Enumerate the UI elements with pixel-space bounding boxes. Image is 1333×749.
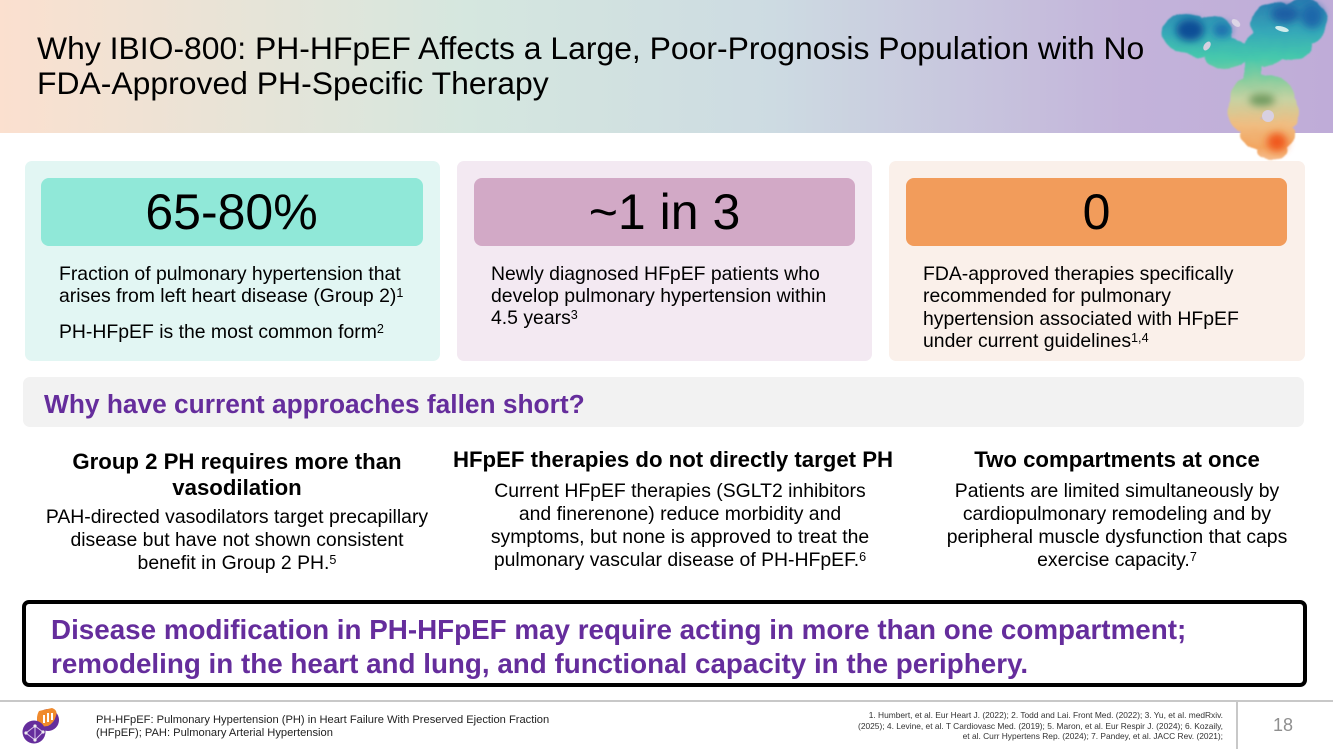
text: FDA-approved therapies: under current guidelines1,4 (923, 330, 1149, 352)
column: Group 2 PH: vasodilation (172, 475, 302, 500)
section heading: Why have current approaches fallen short? (44, 389, 585, 419)
icon: logo (22, 708, 59, 744)
icon: antibody (1160, 0, 1329, 161)
stat card: 0: 0 (1083, 184, 1110, 240)
stat card: 65-80% (41, 178, 422, 246)
column: Group 2 PH (46, 449, 428, 574)
column: Group 2 PH: PAH-directed vasodilators target precapillary (46, 506, 428, 528)
antibody gaps (1202, 40, 1212, 52)
callout: remodeling in the heart and lung, and functional capacity in the periphery. (51, 648, 1028, 679)
text: FDA-approved therapies (923, 263, 1239, 352)
panel: zero therapies stat (889, 161, 1305, 361)
text: FDA-approved therapies: recommended for pulmonary (923, 285, 1171, 307)
text: left heart disease fraction: PH-HFpEF is the most common form2 (59, 321, 384, 343)
panel: 65-80% stat (25, 161, 440, 361)
abbreviations footnote: (HFpEF); PAH: Pulmonary Arterial Hypertension (96, 727, 333, 739)
column: HFpEF therapies: symptoms, but none is approved to treat the (491, 526, 869, 548)
column: Two compartments: Two compartments at once (974, 447, 1260, 472)
column: HFpEF therapies: pulmonary vascular disease of PH-HFpEF.6 (494, 549, 866, 571)
title: FDA-Approved PH-Specific Therapy (37, 65, 549, 101)
text: left heart disease fraction (59, 263, 403, 343)
panel: 1 in 3 stat (457, 161, 872, 361)
column: HFpEF therapies: Current HFpEF therapies (SGLT2 inhibitors (494, 480, 866, 502)
text: newly diagnosed patients: 4.5 years3 (491, 307, 578, 329)
stat card: 1 in 3: ~1 in 3 (589, 184, 740, 240)
title: Why IBIO-800: PH-HFpEF Affects a Large, Poor-Prognosis Population with No (37, 30, 1144, 66)
text: left heart disease fraction: Fraction of pulmonary hypertension that (59, 263, 401, 285)
page number: 18 (1273, 715, 1293, 735)
stat card: 1 in 3 (474, 178, 855, 246)
abbreviations footnote: PH-HFpEF: Pulmonary Hypertension (PH) in Heart Failure With Preserved Ejection Fraction (96, 714, 549, 726)
text: newly diagnosed patients (491, 263, 826, 329)
stat card: 0 (906, 178, 1287, 246)
text: FDA-approved therapies: hypertension associated with HFpEF (923, 308, 1239, 330)
callout: Disease modification in PH-HFpEF may require acting in more than one compartment; (51, 614, 1186, 645)
stat card: 65-80%: 65-80% (145, 184, 318, 240)
text: left heart disease fraction: arises from left heart disease (Group 2)1 (59, 285, 403, 307)
abbreviations footnote (96, 714, 549, 739)
references: 1. Humbert, et al. Eur Heart J. (2022); 2. Todd and Lai. Front Med. (2022); 3. Yu, et al. medRxiv. (869, 710, 1223, 720)
text: FDA-approved therapies: FDA-approved therapies specifically (923, 263, 1233, 285)
column: Two compartments: Patients are limited simultaneously by (955, 480, 1279, 502)
section heading bar (23, 377, 1304, 427)
column: Group 2 PH: disease but have not shown consistent (70, 529, 404, 551)
column: Group 2 PH: benefit in Group 2 PH.5 (138, 552, 336, 574)
title (37, 30, 1144, 101)
text: newly diagnosed patients: Newly diagnosed HFpEF patients who (491, 263, 820, 285)
references: (2025); 4. Levine, et al. T Cardiovasc Med. (2019); 5. Maron, et al. Eur Respir J. (2024); 6. Kozaily, (858, 720, 1223, 730)
text: newly diagnosed patients: develop pulmonary hypertension within (491, 285, 826, 307)
references: et al. Curr Hypertens Rep. (2024); 7. Pandey, et al. JACC Rev. (2021); (963, 731, 1223, 741)
column: HFpEF therapies (453, 447, 893, 571)
callout (22, 600, 1307, 687)
column: Two compartments: peripheral muscle dysfunction that caps (947, 526, 1287, 548)
header banner (0, 0, 1333, 133)
column: Group 2 PH: Group 2 PH requires more than (72, 449, 402, 474)
column: HFpEF therapies: HFpEF therapies do not directly target PH (453, 447, 893, 472)
column: Two compartments: cardiopulmonary remodeling and by (963, 503, 1271, 525)
column: Two compartments (947, 447, 1287, 571)
column: Two compartments: exercise capacity.7 (1037, 549, 1197, 571)
references (858, 710, 1223, 741)
column: HFpEF therapies: and finerenone) reduce morbidity and (519, 503, 841, 525)
